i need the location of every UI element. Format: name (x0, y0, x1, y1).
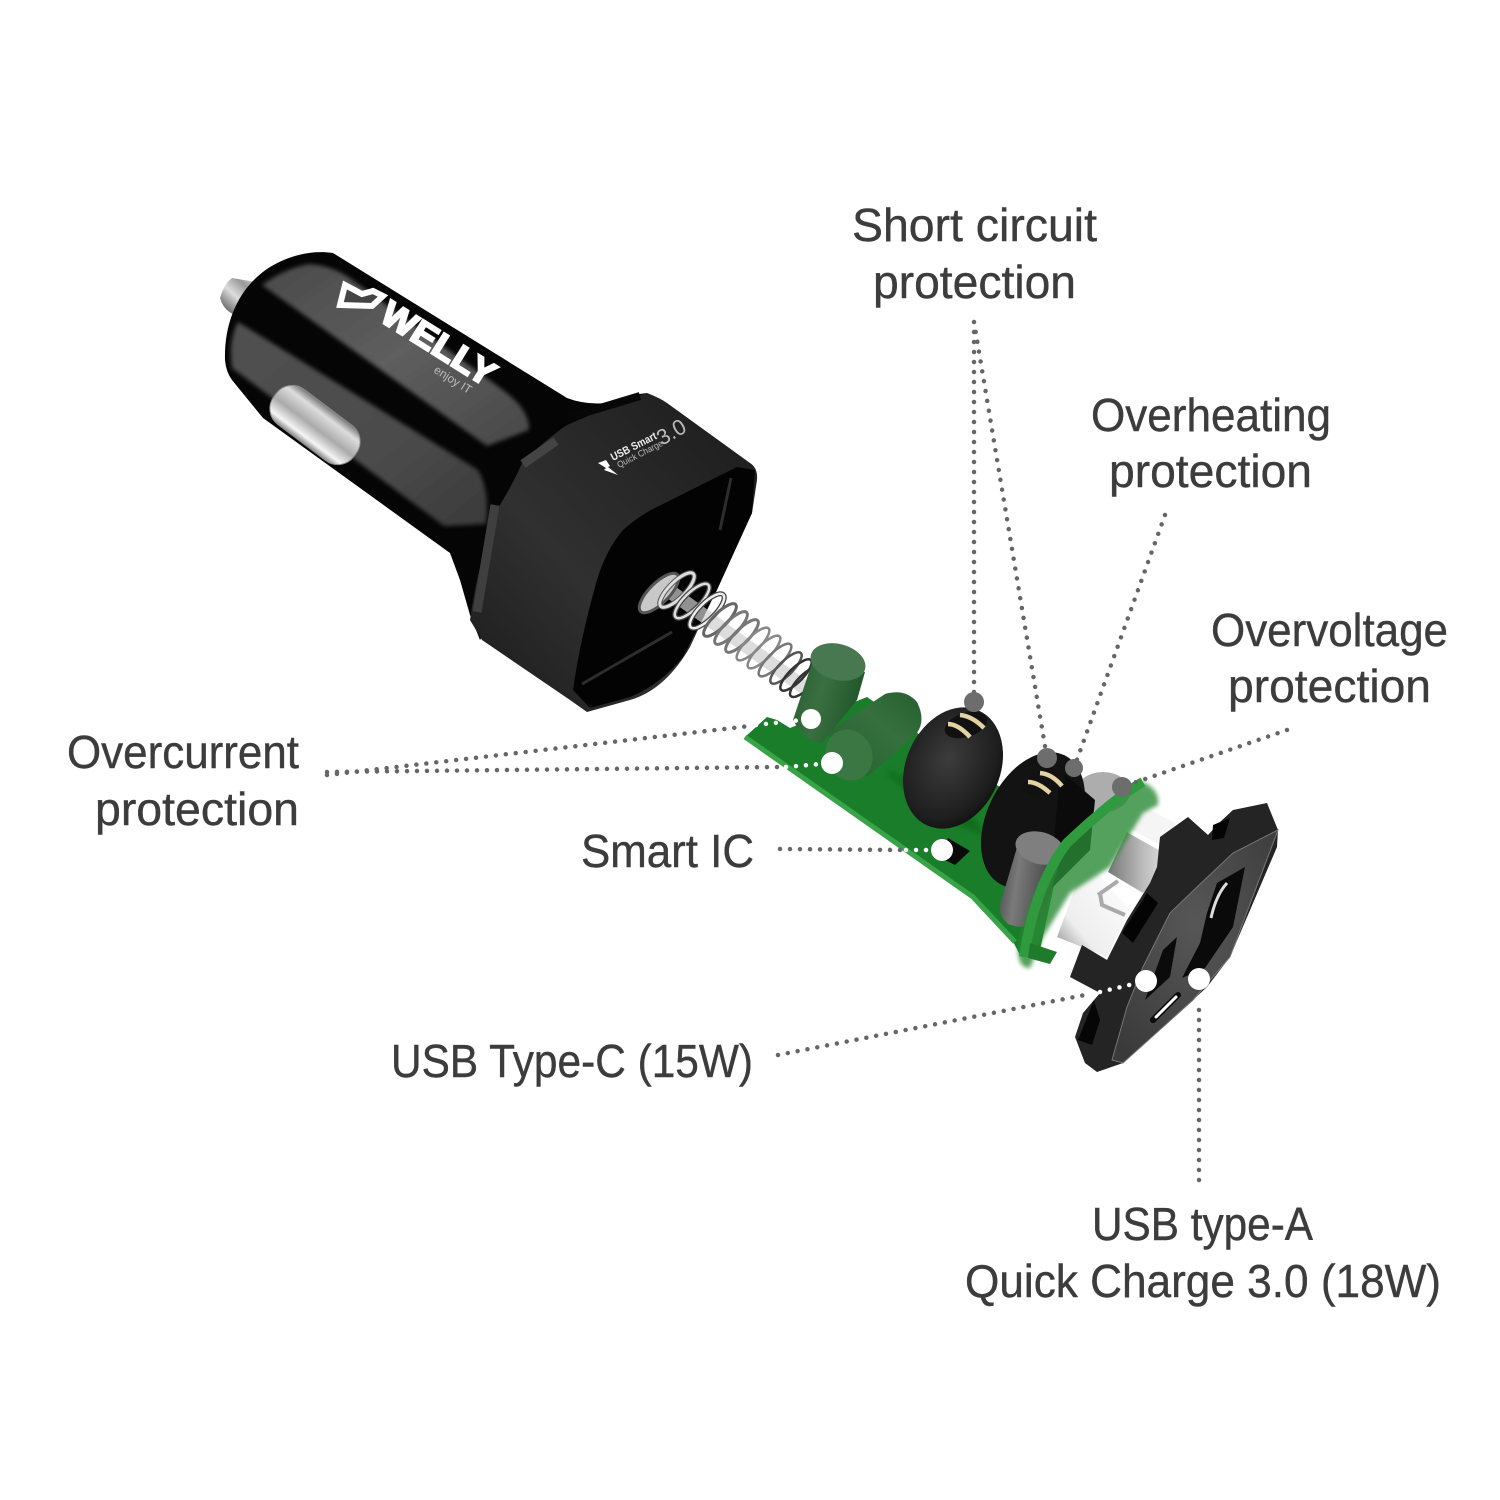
small slot inner (1156, 997, 1176, 1017)
label: overcurrent protection (67, 726, 299, 835)
callout leader: overheating (1074, 515, 1165, 768)
barrel upper highlight band (262, 264, 529, 446)
callout leader: smart IC (780, 849, 942, 850)
tagline: enjoy IT (431, 363, 475, 397)
label: short circuit protection: Short circuit (852, 199, 1097, 251)
black coil two (960, 735, 1106, 905)
glossy rim highlight lower (477, 505, 495, 612)
green capacitor end (817, 722, 881, 788)
spring (634, 568, 824, 701)
label: overvoltage protection (1211, 604, 1448, 712)
brand name: WELLY (374, 294, 503, 395)
circuit board assembly (745, 637, 1278, 1072)
PCB dark shadow area (885, 770, 985, 835)
green PCB (745, 697, 1065, 955)
square head matte shell (470, 393, 757, 712)
grey capacitor body (1000, 837, 1063, 927)
label: USB type-A: Quick Charge 3.0 (18W) (965, 1255, 1441, 1307)
label: short circuit protection: protection (873, 256, 1076, 308)
label: overcurrent protection: protection (95, 783, 299, 835)
glossy plate notch top (1212, 818, 1230, 840)
metal tip pin (220, 278, 262, 316)
label: short circuit protection (852, 199, 1097, 308)
silver USB connector rear top (1128, 806, 1177, 857)
PCB bright edge (745, 737, 1015, 942)
marker dots (801, 692, 1210, 992)
label: USB type-C: USB Type-C (15W) (391, 1035, 753, 1087)
label: overheating protection (1091, 389, 1331, 497)
Quick Charge label: Quick Charge (615, 438, 664, 470)
USB-A port (1182, 867, 1245, 978)
callout leader: USB type-C (778, 981, 1146, 1055)
coil copper winding (1028, 773, 1062, 793)
rear grey capacitor (1076, 772, 1130, 812)
coil body (884, 691, 1022, 845)
heart mark (340, 285, 383, 306)
lightning icon (598, 460, 618, 475)
label: overheating protection: protection (1109, 445, 1312, 497)
callout leader: overvoltage (1122, 730, 1287, 787)
glossy dark rim upper (567, 396, 640, 418)
callout leader: overcurrent (327, 719, 832, 775)
coil opening (1019, 764, 1069, 800)
green capacitor lying (827, 692, 922, 777)
product text on head (598, 414, 690, 475)
label: USB type-A (965, 1198, 1441, 1307)
inner opening strip right (720, 478, 731, 530)
green capacitor top (806, 637, 870, 687)
grey capacitor top (1012, 826, 1068, 870)
PCB lower tab (1028, 943, 1057, 964)
coil copper winding (948, 715, 984, 737)
USB-C port (1145, 937, 1177, 1000)
barrel lower highlight band (231, 322, 487, 526)
connector metal tab (1098, 881, 1125, 915)
silver side button (262, 377, 368, 473)
label: overvoltage protection: protection (1228, 660, 1431, 712)
label: smart IC: Smart IC (581, 825, 754, 877)
white USB connector (1057, 867, 1130, 957)
black face plate (1070, 803, 1278, 1072)
label: USB type-A: USB type-A (1092, 1198, 1313, 1250)
callout leader: USB type-A (1197, 1000, 1201, 1180)
car charger body with head (220, 252, 757, 712)
dark body behind arc (1050, 770, 1095, 890)
label: overvoltage protection: Overvoltage (1211, 604, 1448, 656)
WELLY logo (340, 285, 503, 397)
head front opening (573, 467, 755, 708)
green capacitor upright (793, 663, 865, 743)
inner opening strip bottom (582, 632, 672, 684)
callout leader: short circuit (974, 322, 1047, 758)
3.0 label: 3.0 (652, 414, 690, 450)
silver USB connector rear (1108, 830, 1177, 893)
label: overcurrent protection: Overcurrent (67, 726, 299, 778)
arc PCB bright strip (1024, 782, 1143, 957)
grey plate front (1112, 830, 1278, 1063)
black coil one (884, 691, 1022, 845)
USB Smart label: USB Smart (609, 430, 659, 464)
glossy plate notch bottom (1078, 1000, 1100, 1045)
coil body (960, 735, 1106, 905)
glossy plate notch lower (1122, 893, 1158, 943)
label: overheating protection: Overheating (1091, 389, 1331, 441)
arc PCB translucent area (1018, 782, 1158, 968)
glossy rim highlight upper (523, 441, 556, 464)
coil opening (941, 707, 991, 743)
connector edge strip (1128, 830, 1176, 857)
IC chip (941, 838, 970, 865)
USB-A port highlight (1211, 883, 1227, 918)
glossy black barrel (225, 252, 647, 640)
small slot (1153, 995, 1178, 1020)
